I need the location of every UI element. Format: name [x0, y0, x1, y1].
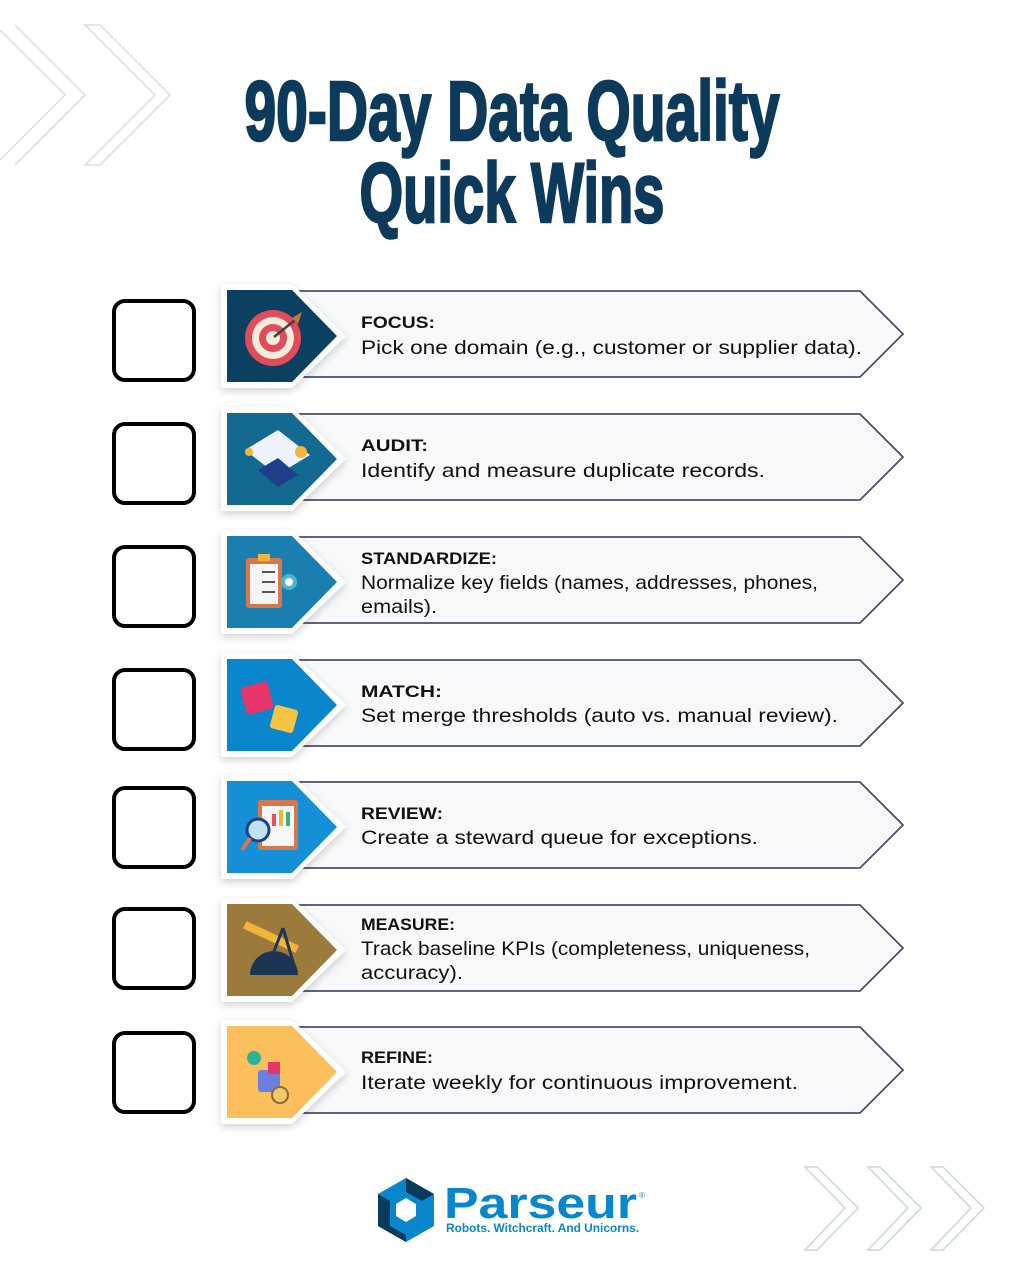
row: FOCUS: FOCUS:: [361, 313, 435, 332]
row: REVIEW: [114, 775, 903, 879]
row: STANDARDIZE: emails).: [361, 596, 437, 618]
row: MEASURE: accuracy).: [361, 962, 463, 984]
logo: Parseur: ®: [639, 1191, 645, 1200]
title: Quick Wins: [360, 146, 664, 240]
row: MATCH: Set merge thresholds (auto vs. manual review).: [361, 705, 838, 727]
icon: calendar coins: [245, 430, 310, 487]
row: REVIEW: REVIEW:: [361, 804, 443, 823]
row: AUDIT: AUDIT:: [361, 436, 428, 455]
row: AUDIT: Identify and measure duplicate records.: [361, 460, 765, 482]
row: REFINE: REFINE:: [361, 1048, 433, 1067]
logo: Parseur: Parseur: [444, 1179, 637, 1228]
row: STANDARDIZE: [114, 530, 903, 634]
row: AUDIT: [114, 407, 903, 511]
decoration: bottom-right chevrons: [805, 1167, 984, 1250]
row: MATCH: [114, 653, 903, 757]
row: MATCH: MATCH:: [361, 682, 442, 701]
row: MEASURE: MEASURE:: [361, 915, 455, 934]
icon: ruler protractor: [243, 921, 299, 975]
logo: Parseur: [378, 1178, 645, 1242]
icon: puzzle: [240, 681, 299, 734]
row: MEASURE: Track baseline KPIs (completeness, uniqueness,: [361, 938, 810, 960]
row: REFINE: [114, 1020, 903, 1124]
row: STANDARDIZE: Normalize key fields (names, addresses, phones,: [361, 572, 818, 594]
icon: puzzle head: [247, 1051, 288, 1103]
row: FOCUS: [114, 284, 903, 388]
logo: Parseur: Robots. Witchcraft. And Unicorns.: [446, 1223, 639, 1235]
icon: target: [245, 310, 302, 366]
row: MEASURE: [114, 898, 903, 1002]
icon: checklist: [246, 554, 297, 608]
decoration: top-left chevrons: [0, 25, 170, 165]
row: REFINE: Iterate weekly for continuous improvement.: [361, 1072, 798, 1094]
row: FOCUS: Pick one domain (e.g., customer or supplier data).: [361, 337, 862, 359]
icon: report magnifier: [242, 800, 298, 850]
row: REVIEW: Create a steward queue for exceptions.: [361, 827, 758, 849]
row: STANDARDIZE: STANDARDIZE:: [361, 549, 497, 568]
title: [244, 64, 780, 240]
title: 90-Day Data Quality: [244, 64, 780, 158]
